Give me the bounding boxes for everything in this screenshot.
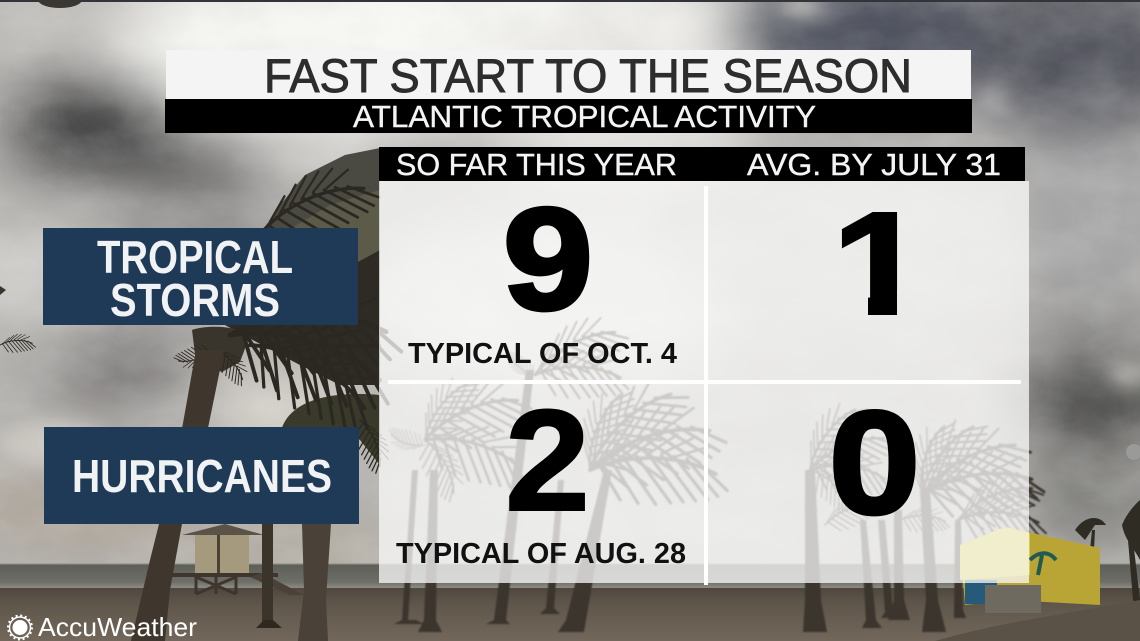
background: sea (0, 563, 1140, 590)
background: sandy beach (0, 588, 1140, 641)
beach hut (935, 527, 1140, 641)
value: hurricanes average: 0 (829, 381, 920, 544)
note: typical of Aug. 28: TYPICAL OF AUG. 28 (396, 538, 686, 570)
value: hurricanes so far this year: 2 (505, 380, 590, 541)
row label: tropical storms: STORMS (110, 274, 280, 326)
row label: tropical storms (43, 228, 358, 326)
column headers (379, 147, 1025, 182)
row label: hurricanes (44, 427, 359, 524)
row label: hurricanes: HURRICANES (72, 450, 332, 502)
foreground palm tree: large fronds (0, 148, 403, 475)
column headers: SO FAR THIS YEAR (396, 147, 677, 182)
palm trees behind the panel (386, 302, 1046, 632)
title banner: FAST START TO THE SEASON (264, 49, 912, 102)
subtitle banner: ATLANTIC TROPICAL ACTIVITY (353, 99, 816, 134)
right side: small palms and lamp (1075, 444, 1140, 610)
panel vertical divider (704, 186, 708, 585)
translucent data panel (379, 181, 1029, 583)
foreground palm trunks (131, 350, 331, 641)
value: tropical storms average: 1 (832, 182, 927, 345)
lifeguard stand (170, 524, 304, 595)
value: tropical storms so far this year: 9 (503, 178, 593, 340)
note: typical of Oct. 4: TYPICAL OF OCT. 4 (408, 338, 677, 370)
column headers: AVG. BY JULY 31 (747, 147, 1001, 182)
subtitle banner (165, 99, 972, 134)
row label: tropical storms: TROPICAL (97, 231, 293, 283)
panel horizontal divider (388, 380, 1021, 384)
